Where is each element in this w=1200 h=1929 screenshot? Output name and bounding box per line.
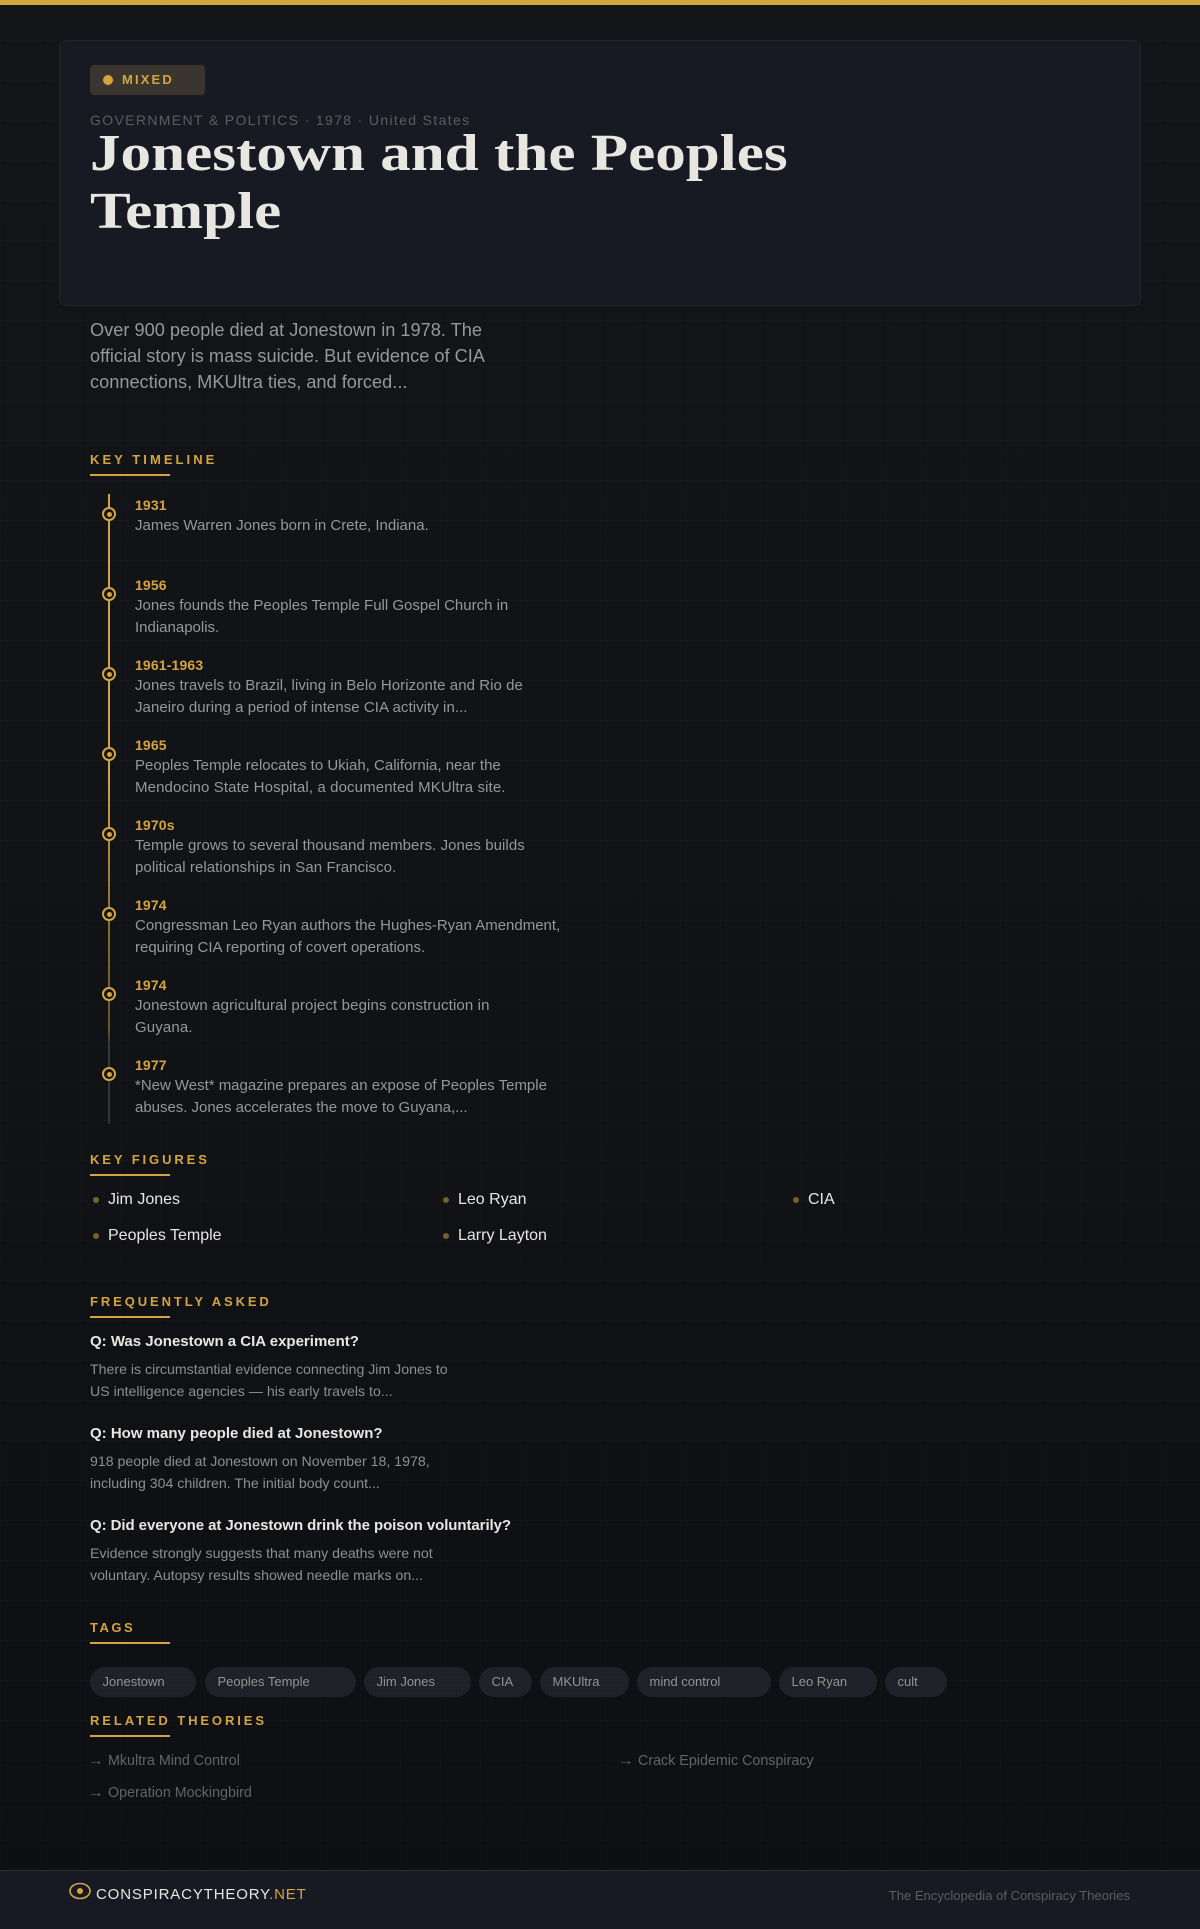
timeline item: 1974 Ryan: Congressman Leo Ryan authors the Hughes-Ryan Amendment, — [135, 917, 560, 934]
figure: Larry Layton: Larry Layton — [458, 1227, 547, 1244]
timeline item: 1965: Mendocino State Hospital, a documented MKUltra site. — [135, 779, 506, 796]
figure: Jim Jones: Jim Jones — [108, 1191, 180, 1208]
timeline item: 1977 — [102, 1057, 547, 1116]
timeline item: 1931 — [102, 497, 429, 534]
title: Jonestown and the Peoples — [90, 125, 788, 182]
timeline — [108, 494, 110, 1124]
faq: CIA experiment — [90, 1333, 448, 1399]
figure: CIA: CIA — [808, 1191, 835, 1208]
footer brand: CONSPIRACYTHEORY.NET — [96, 1886, 307, 1903]
tag: Jonestown: Jonestown — [102, 1674, 165, 1689]
timeline item: 1961-1963: Janeiro during a period of intense CIA activity in... — [135, 699, 468, 716]
figure: Leo Ryan: Leo Ryan — [458, 1191, 526, 1208]
category and date line: GOVERNMENT & POLITICS · 1978 · United States — [90, 112, 470, 128]
panel: hero header — [59, 40, 1141, 306]
tag: Leo Ryan: Leo Ryan — [792, 1674, 847, 1689]
related link: Crack Epidemic Conspiracy: → — [618, 1753, 634, 1769]
tag: Jonestown — [90, 1667, 196, 1697]
related link: Mkultra Mind Control: Mkultra Mind Control — [108, 1753, 240, 1769]
tag: Jim Jones: Jim Jones — [376, 1674, 435, 1689]
faq: how many died: including 304 children. The initial body count... — [90, 1475, 380, 1491]
timeline item: 1965 — [102, 737, 506, 796]
text: 1931 — [135, 497, 167, 513]
text: 1956 — [135, 577, 167, 593]
faq: voluntary: Evidence strongly suggests that many deaths were not — [90, 1545, 433, 1561]
tag: CIA: CIA — [492, 1674, 513, 1689]
tag: MKUltra — [540, 1667, 629, 1697]
related link: Crack Epidemic Conspiracy: Crack Epidemic Conspiracy — [638, 1753, 814, 1769]
faq: voluntary: Q: Did everyone at Jonestown drink the poison voluntarily? — [90, 1517, 511, 1534]
text: 1974 — [135, 897, 167, 913]
intro paragraph: connections, MKUltra ties, and forced... — [90, 372, 407, 392]
related link: Mkultra Mind Control: → — [88, 1753, 104, 1769]
tag: cult: cult — [898, 1674, 918, 1689]
badge: mixed — [90, 65, 205, 95]
timeline item: 1970s: Temple grows to several thousand members. Jones builds — [135, 837, 525, 854]
related link: Operation Mockingbird: Operation Mockingbird — [108, 1785, 252, 1801]
figure: Peoples Temple: Peoples Temple — [108, 1227, 222, 1244]
timeline item: 1956: Jones founds the Peoples Temple Full Gospel Church in — [135, 597, 508, 614]
text: 1961-1963 — [135, 657, 203, 673]
timeline item: 1974 Jonestown — [102, 977, 490, 1036]
timeline item: 1974 Ryan: requiring CIA reporting of covert operations. — [135, 939, 425, 956]
icon: eye logo — [69, 1882, 91, 1900]
tag: cult — [885, 1667, 947, 1697]
tag: mind control: mind control — [650, 1674, 720, 1689]
faq: CIA experiment: Q: Was Jonestown a CIA experiment? — [90, 1333, 359, 1350]
top accent bar — [0, 0, 1200, 5]
timeline item: 1974 Jonestown: Guyana. — [135, 1019, 193, 1036]
tag: CIA — [479, 1667, 532, 1697]
faq: CIA experiment: There is circumstantial evidence connecting Jim Jones to — [90, 1361, 448, 1377]
timeline item: 1977: abuses. Jones accelerates the move to Guyana,... — [135, 1099, 468, 1116]
faq: voluntary — [90, 1517, 511, 1583]
timeline item: 1931: James Warren Jones born in Crete, Indiana. — [135, 517, 429, 534]
timeline item: 1970s — [102, 817, 525, 876]
related link: Operation Mockingbird: → — [88, 1785, 104, 1801]
heading: related theories: RELATED THEORIES — [90, 1713, 267, 1728]
timeline item: 1977: *New West* magazine prepares an expose of Peoples Temple — [135, 1077, 547, 1094]
timeline item: 1956 — [102, 577, 508, 636]
timeline item: 1956: Indianapolis. — [135, 619, 219, 636]
timeline item: 1965: Peoples Temple relocates to Ukiah, California, near the — [135, 757, 501, 774]
heading: key figures: KEY FIGURES — [90, 1152, 210, 1167]
text: 1970s — [135, 817, 175, 833]
heading: tags: TAGS — [90, 1620, 135, 1635]
timeline line — [108, 494, 110, 1124]
timeline item: 1961-1963 — [102, 657, 523, 716]
heading: frequently asked: FREQUENTLY ASKED — [90, 1294, 272, 1309]
tag: Jim Jones — [364, 1667, 471, 1697]
tag: mind control — [637, 1667, 771, 1697]
faq: how many died — [90, 1425, 430, 1491]
timeline item: 1961-1963: Jones travels to Brazil, living in Belo Horizonte and Rio de — [135, 677, 523, 694]
faq: how many died: 918 people died at Jonestown on November 18, 1978, — [90, 1453, 430, 1469]
tag: MKUltra: MKUltra — [552, 1674, 599, 1689]
intro paragraph: official story is mass suicide. But evidence of CIA — [90, 346, 485, 366]
tag: Leo Ryan — [779, 1667, 877, 1697]
intro paragraph: Over 900 people died at Jonestown in 1978. The — [90, 320, 482, 340]
timeline item: 1970s: political relationships in San Francisco. — [135, 859, 396, 876]
faq: voluntary: voluntary. Autopsy results showed needle marks on... — [90, 1567, 423, 1583]
text: 1965 — [135, 737, 167, 753]
timeline item: 1974 Jonestown: Jonestown agricultural project begins construction in — [135, 997, 490, 1014]
title — [90, 125, 788, 240]
tag: Peoples Temple — [205, 1667, 356, 1697]
title: Temple — [90, 183, 281, 240]
badge dot — [103, 75, 113, 85]
intro paragraph — [90, 320, 485, 392]
timeline item: 1974 Ryan — [102, 897, 560, 956]
text: 1974 — [135, 977, 167, 993]
tag: Peoples Temple: Peoples Temple — [218, 1674, 310, 1689]
footer tagline: The Encyclopedia of Conspiracy Theories — [889, 1888, 1130, 1903]
footer — [0, 1870, 1200, 1929]
badge label: MIXED — [122, 72, 174, 87]
figure: CIA — [793, 1191, 835, 1208]
heading: key timeline: KEY TIMELINE — [90, 452, 217, 467]
text: 1977 — [135, 1057, 167, 1073]
faq: how many died: Q: How many people died at Jonestown? — [90, 1425, 383, 1442]
faq: CIA experiment: US intelligence agencies — his early travels to... — [90, 1383, 393, 1399]
